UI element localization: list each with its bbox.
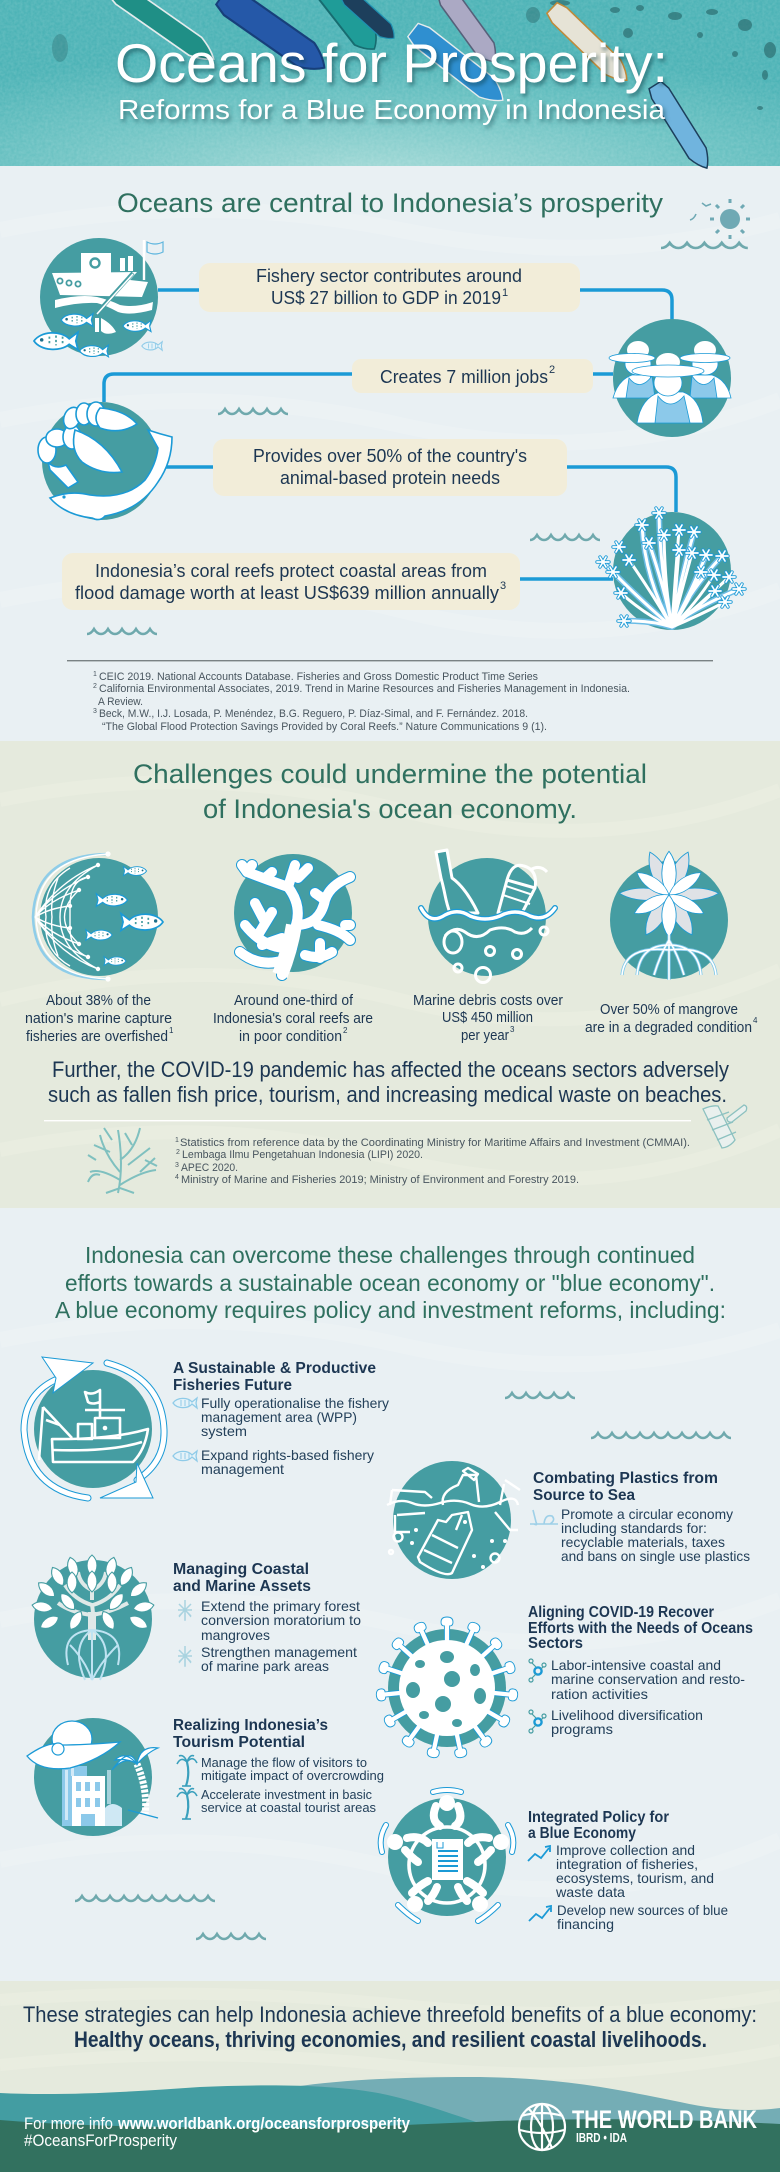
- caption: mangrove: 4: [753, 1016, 758, 1025]
- block: sustainable fisheries: management area (WPP): [201, 1409, 357, 1425]
- block: combating plastics: Combating Plastics from: [533, 1470, 718, 1487]
- heading: challenges: [133, 759, 647, 824]
- block: sustainable fisheries: system: [201, 1423, 247, 1439]
- caption: overfished: [25, 992, 174, 1045]
- block: aligning COVID-19 recovery: Labor-intensive coastal and: [551, 1657, 721, 1673]
- block: aligning COVID-19 recovery: ration activities: [551, 1686, 648, 1702]
- heading: challenges: Challenges could undermine the potential: [133, 759, 647, 789]
- section 3 wave texture: [0, 1321, 780, 1889]
- caption: coral reefs: Indonesia's coral reefs are: [213, 1010, 373, 1027]
- block: sustainable fisheries: Fully operationalise the fishery: [201, 1395, 389, 1411]
- footnotes: section 1: 2: [93, 683, 97, 690]
- footer link text: For more info: [24, 2114, 113, 2133]
- block: integrated policy: Integrated Policy for: [528, 1809, 669, 1826]
- text: blue economy intro: [55, 1242, 726, 1323]
- block: tourism potential: Tourism Potential: [173, 1734, 305, 1751]
- footnotes: section 1: Beck, M.W., I.J. Losada, P. Menéndez, B.G. Reguero, P. Díaz-Simal, and F. Fernández. 2018.: [99, 708, 528, 720]
- icon: coastal tourism: [27, 1718, 158, 1836]
- text: COVID-19 impact: Further, the COVID-19 pandemic has affected the oceans sectors adversely: [52, 1057, 729, 1082]
- footnotes: section 2: APEC 2020.: [181, 1162, 238, 1174]
- icon: marine debris: [421, 850, 555, 982]
- box: jobs: 2: [549, 364, 555, 376]
- box: protein: [213, 439, 567, 496]
- footnotes: section 2: 3: [175, 1162, 179, 1169]
- icon: fishers: [609, 319, 731, 437]
- footnotes: section 1: California Environmental Associates, 2019. Trend in Marine Resources and Fisheries Management in Indonesia.: [99, 683, 630, 695]
- block: managing coastal assets: of marine park areas: [201, 1658, 329, 1674]
- wave: [218, 409, 288, 414]
- caption: overfished: fisheries are overfished: [26, 1028, 168, 1045]
- block: tourism potential: Accelerate investment in basic: [201, 1787, 372, 1802]
- footnotes: section 1: [67, 660, 713, 733]
- caption: mangrove: [585, 1001, 758, 1036]
- block: managing coastal assets: conversion moratorium to: [201, 1612, 361, 1628]
- footnotes: section 1: A Review.: [98, 696, 143, 708]
- panel: conclusion background: [0, 1981, 780, 2172]
- icon: coral: [234, 854, 352, 975]
- icon: fishing net and fish: [33, 851, 163, 982]
- block: combating plastics: recyclable materials, taxes: [561, 1534, 725, 1550]
- footnotes: section 2: Lembaga Ilmu Pengetahuan Indonesia (LIPI) 2020.: [182, 1149, 423, 1161]
- text: threefold benefits: Healthy oceans, thriving economies, and resilient coastal livelihoods.: [74, 2027, 707, 2052]
- box: jobs: [352, 359, 593, 393]
- block: integrated policy: a Blue Economy: [528, 1825, 636, 1842]
- logo: The World Bank: IBRD • IDA: [576, 2130, 627, 2145]
- footnotes: section 1: CEIC 2019. National Accounts Database. Fisheries and Gross Domestic Product Time Series: [99, 671, 538, 683]
- caption: marine debris: US$ 450 million: [442, 1009, 533, 1026]
- footnotes: section 1: 1: [93, 671, 97, 678]
- footnotes: section 2: 2: [176, 1149, 180, 1156]
- block: aligning COVID-19 recovery: Efforts with the Needs of Oceans: [528, 1620, 753, 1637]
- block: combating plastics: Promote a circular economy: [561, 1506, 733, 1522]
- block: sustainable fisheries: Fisheries Future: [173, 1377, 292, 1394]
- box: fishery GDP: 1: [502, 287, 508, 299]
- block: combating plastics: including standards for:: [561, 1520, 707, 1536]
- caption: marine debris: [413, 992, 563, 1044]
- text: COVID-19 impact: such as fallen fish price, tourism, and increasing medical waste on beaches.: [48, 1082, 727, 1107]
- footnotes: section 1: 3: [93, 708, 97, 715]
- box: fishery GDP: Fishery sector contributes around: [256, 266, 522, 286]
- footnotes: section 2: [175, 1137, 690, 1186]
- caption: coral reefs: 2: [343, 1026, 348, 1035]
- icon: integrated policy table: [381, 1790, 513, 1921]
- box: protein: animal-based protein needs: [280, 468, 500, 488]
- box: protein: Provides over 50% of the country's: [253, 446, 527, 466]
- icon: mangrove: [610, 849, 728, 980]
- wave: [505, 1393, 575, 1398]
- block: tourism potential: [173, 1717, 384, 1819]
- caption: coral reefs: [213, 992, 373, 1045]
- heading: challenges: of Indonesia's ocean economy.: [203, 794, 577, 824]
- footnotes: section 2: 1: [175, 1137, 179, 1144]
- block: managing coastal assets: Strengthen management: [201, 1644, 357, 1660]
- connectors between benefit boxes: [104, 290, 676, 579]
- section 1 wave texture: [0, 210, 780, 631]
- block: tourism potential: Manage the flow of visitors to: [201, 1755, 367, 1770]
- caption: overfished: nation's marine capture: [25, 1010, 172, 1027]
- block: sustainable fisheries: [173, 1360, 389, 1477]
- footnotes: section 2: 4: [175, 1174, 179, 1181]
- main title: Oceans for Prosperity:: [115, 32, 668, 94]
- footer link text: #OceansForProsperity: [24, 2131, 177, 2150]
- panel: challenges background: [0, 741, 780, 1208]
- block: managing coastal assets: [173, 1561, 361, 1674]
- icon: sustainable fisheries boat with cycle arrows: [24, 1357, 164, 1498]
- block: aligning COVID-19 recovery: [528, 1604, 753, 1737]
- reef speckles: [52, 0, 776, 110]
- wave: [87, 629, 157, 634]
- wave long: [75, 1896, 215, 1901]
- footnotes: section 2: Ministry of Marine and Fisheries 2019; Ministry of Environment and Forestry 2019.: [181, 1174, 579, 1186]
- box: coral reefs flood protection: flood damage worth at least US$639 million annually: [75, 583, 499, 603]
- box: coral reefs flood protection: 3: [500, 580, 506, 592]
- block: managing coastal assets: mangroves: [201, 1627, 270, 1643]
- box: coral reefs flood protection: [62, 553, 520, 610]
- icon: virus: [376, 1617, 518, 1759]
- caption: marine debris: per year: [461, 1027, 509, 1044]
- box: fishery GDP: [199, 263, 580, 312]
- block: tourism potential: mitigate impact of overcrowding: [201, 1768, 384, 1783]
- wave: [530, 535, 600, 540]
- header: aerial photo of boats with title: [0, 0, 780, 173]
- block: sustainable fisheries: Expand rights-based fishery: [201, 1447, 374, 1463]
- block: integrated policy: financing: [557, 1916, 614, 1932]
- box: jobs: Creates 7 million jobs: [380, 367, 548, 387]
- block: tourism potential: Realizing Indonesia’s: [173, 1717, 328, 1734]
- text: threefold benefits: [23, 2002, 757, 2052]
- block: managing coastal assets: Managing Coastal: [173, 1561, 309, 1578]
- logo: The World Bank: [519, 2104, 757, 2150]
- box: fishery GDP: US$ 27 billion to GDP in 2019: [271, 288, 501, 308]
- footer waves: [0, 2077, 780, 2172]
- footer link text: [24, 2114, 410, 2150]
- caption: marine debris: Marine debris costs over: [413, 992, 563, 1009]
- caption: coral reefs: Around one-third of: [234, 992, 354, 1009]
- subtitle: Reforms for a Blue Economy in Indonesia: [118, 94, 665, 125]
- text: COVID-19 impact: [48, 1057, 729, 1107]
- icon: fishing boat and fish: [34, 238, 163, 357]
- icon: coral outline: [88, 1128, 157, 1193]
- block: combating plastics: and bans on single use plastics: [561, 1548, 750, 1564]
- block: aligning COVID-19 recovery: Aligning COVID-19 Recover: [528, 1604, 714, 1621]
- section 4 wave texture: [0, 1994, 780, 2074]
- footnotes: section 2: Statistics from reference data by the Coordinating Ministry for Maritime Affairs and Investment (CMMAI).: [180, 1137, 690, 1149]
- icon: shrimp and fish: [38, 402, 172, 520]
- box: coral reefs flood protection: Indonesia’s coral reefs protect coastal areas from: [95, 561, 487, 581]
- icon: mangrove tree: [31, 1555, 155, 1680]
- footnotes: section 1: “The Global Flood Protection Savings Provided by Coral Reefs.” Nature Communications 9 (1).: [102, 721, 547, 733]
- section 2 wave texture: [0, 782, 780, 1179]
- block: integrated policy: integration of fisheries,: [556, 1856, 698, 1872]
- caption: overfished: About 38% of the: [46, 992, 151, 1009]
- caption: marine debris: 3: [510, 1025, 515, 1034]
- block: tourism potential: service at coastal tourist areas: [201, 1800, 376, 1815]
- icon: medical mask: [703, 1105, 747, 1148]
- icon: sun and birds over waves: [661, 199, 750, 248]
- block: integrated policy: [528, 1809, 728, 1932]
- block: integrated policy: Improve collection and: [556, 1842, 695, 1858]
- block: integrated policy: ecosystems, tourism, and: [556, 1870, 714, 1886]
- divider: [44, 1120, 691, 1121]
- text: blue economy intro: A blue economy requires policy and investment reforms, including:: [55, 1297, 726, 1323]
- block: integrated policy: Develop new sources of blue: [557, 1902, 728, 1918]
- caption: overfished: 1: [169, 1026, 174, 1035]
- icon: plastics in sea: [387, 1461, 520, 1579]
- wave long: [591, 1433, 731, 1438]
- footer link text: www.worldbank.org/oceansforprosperity: [117, 2114, 410, 2133]
- block: aligning COVID-19 recovery: marine conservation and resto-: [551, 1671, 745, 1687]
- block: integrated policy: waste data: [555, 1884, 625, 1900]
- block: combating plastics: [530, 1470, 750, 1564]
- block: managing coastal assets: Extend the primary forest: [201, 1598, 360, 1614]
- block: aligning COVID-19 recovery: Livelihood diversification: [551, 1707, 703, 1723]
- block: sustainable fisheries: management: [201, 1461, 284, 1477]
- block: combating plastics: Source to Sea: [533, 1487, 635, 1504]
- heading: oceans are central: Oceans are central to Indonesia’s prosperity: [117, 188, 664, 218]
- caption: mangrove: Over 50% of mangrove: [600, 1001, 738, 1018]
- text: blue economy intro: efforts towards a sustainable ocean economy or "blue economy".: [65, 1270, 715, 1296]
- boats: [106, 0, 715, 173]
- caption: coral reefs: in poor condition: [239, 1028, 342, 1045]
- block: managing coastal assets: and Marine Assets: [173, 1578, 311, 1595]
- block: aligning COVID-19 recovery: Sectors: [528, 1635, 583, 1652]
- icon: coral reef: [597, 508, 745, 630]
- text: blue economy intro: Indonesia can overcome these challenges through continued: [85, 1242, 695, 1268]
- block: sustainable fisheries: A Sustainable & Productive: [173, 1360, 376, 1377]
- block: aligning COVID-19 recovery: programs: [551, 1721, 613, 1737]
- caption: mangrove: are in a degraded condition: [585, 1019, 752, 1036]
- wave: [196, 1934, 266, 1939]
